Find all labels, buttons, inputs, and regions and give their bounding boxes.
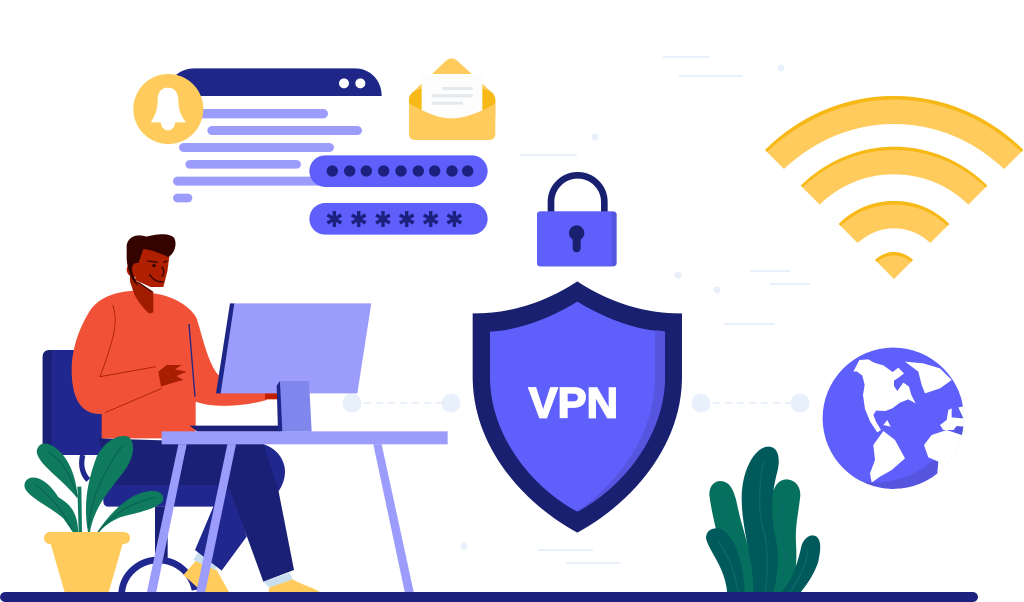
plant: right bbox=[706, 447, 820, 593]
email envelope icon bbox=[409, 58, 495, 140]
near leg and shoe bbox=[98, 438, 321, 593]
window control dots bbox=[339, 78, 365, 88]
password field: asterisks: ✱ bbox=[374, 208, 392, 233]
icon: bell bbox=[151, 88, 186, 130]
icon: padlock bbox=[537, 175, 617, 266]
password field: asterisks bbox=[309, 203, 488, 235]
desk bbox=[147, 431, 448, 593]
connection line: computer to shield bbox=[342, 394, 460, 412]
office chair bbox=[43, 350, 230, 593]
password field: asterisks: ✱ bbox=[397, 208, 416, 233]
text lines bbox=[173, 109, 362, 202]
far leg and shoe bbox=[183, 483, 247, 593]
flower pot bbox=[50, 542, 123, 593]
plant: left, potted bbox=[24, 436, 163, 593]
globe bbox=[822, 348, 964, 489]
hand bbox=[158, 365, 187, 387]
notification bell badge bbox=[133, 74, 203, 144]
browser window bbox=[163, 68, 382, 202]
ground line bbox=[0, 592, 978, 602]
browser title bar bbox=[163, 68, 382, 96]
connection line: shield to globe bbox=[692, 394, 810, 412]
password field: asterisks: ✱ bbox=[349, 208, 368, 233]
computer monitor bbox=[189, 303, 371, 431]
password field: asterisks: ✱ bbox=[421, 208, 440, 233]
password field: asterisks: ✱ bbox=[445, 208, 464, 233]
icon: wifi signal bbox=[765, 96, 1023, 279]
head and hair bbox=[127, 234, 176, 314]
shield bbox=[473, 281, 682, 533]
continents bbox=[853, 359, 967, 487]
password field: asterisks: ✱ bbox=[325, 208, 344, 233]
torso in orange sweater bbox=[72, 291, 267, 438]
person at desk scene bbox=[24, 291, 448, 593]
password field: dots bbox=[309, 155, 488, 187]
shield label: VPN bbox=[529, 379, 618, 426]
